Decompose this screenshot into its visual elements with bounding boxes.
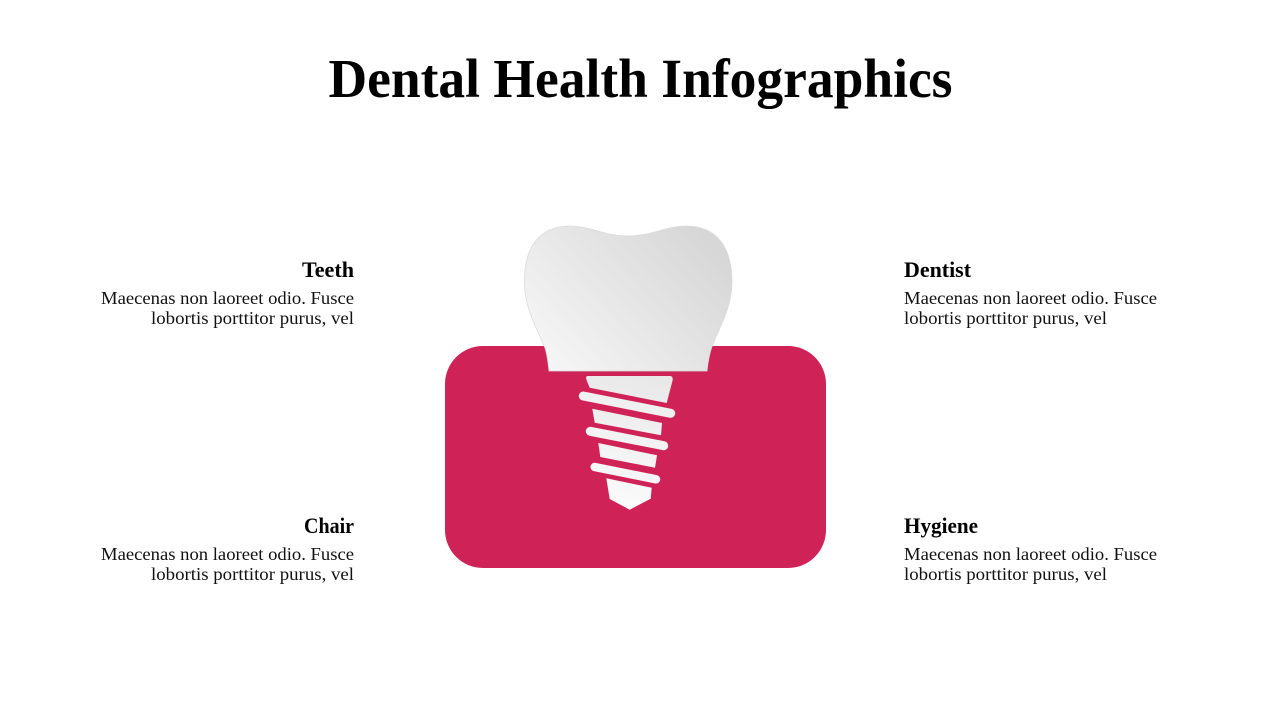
icon: implant screw [583,376,673,510]
text block: Dentist [904,257,1157,328]
heading: Hygiene: Hygiene [904,513,978,538]
body: Chair: Maecenas non laoreet odio. Fusce [101,544,354,564]
body: Dentist: lobortis porttitor purus, vel [904,308,1107,328]
gum block [445,346,826,568]
body: Hygiene [904,544,1157,584]
text block: Chair [101,513,354,584]
text block: Hygiene [904,513,1157,584]
body: Dentist [904,288,1157,328]
body: Hygiene: Maecenas non laoreet odio. Fusce [904,544,1157,564]
body: Dentist: Maecenas non laoreet odio. Fusce [904,288,1157,308]
body: Chair [101,544,354,584]
body: Hygiene: lobortis porttitor purus, vel [904,564,1107,584]
illustration: dental implant [445,226,826,568]
body: Teeth: Maecenas non laoreet odio. Fusce [101,288,354,308]
body: Chair: lobortis porttitor purus, vel [151,564,354,584]
title: Dental Health Infographics [328,48,952,109]
icon: tooth crown [524,226,732,371]
text block: Teeth [101,257,354,328]
body: Teeth: lobortis porttitor purus, vel [151,308,354,328]
heading: Chair: Chair [304,513,354,538]
heading: Teeth: Teeth [302,257,354,282]
heading: Dentist: Dentist [904,257,972,282]
body: Teeth [101,288,354,328]
